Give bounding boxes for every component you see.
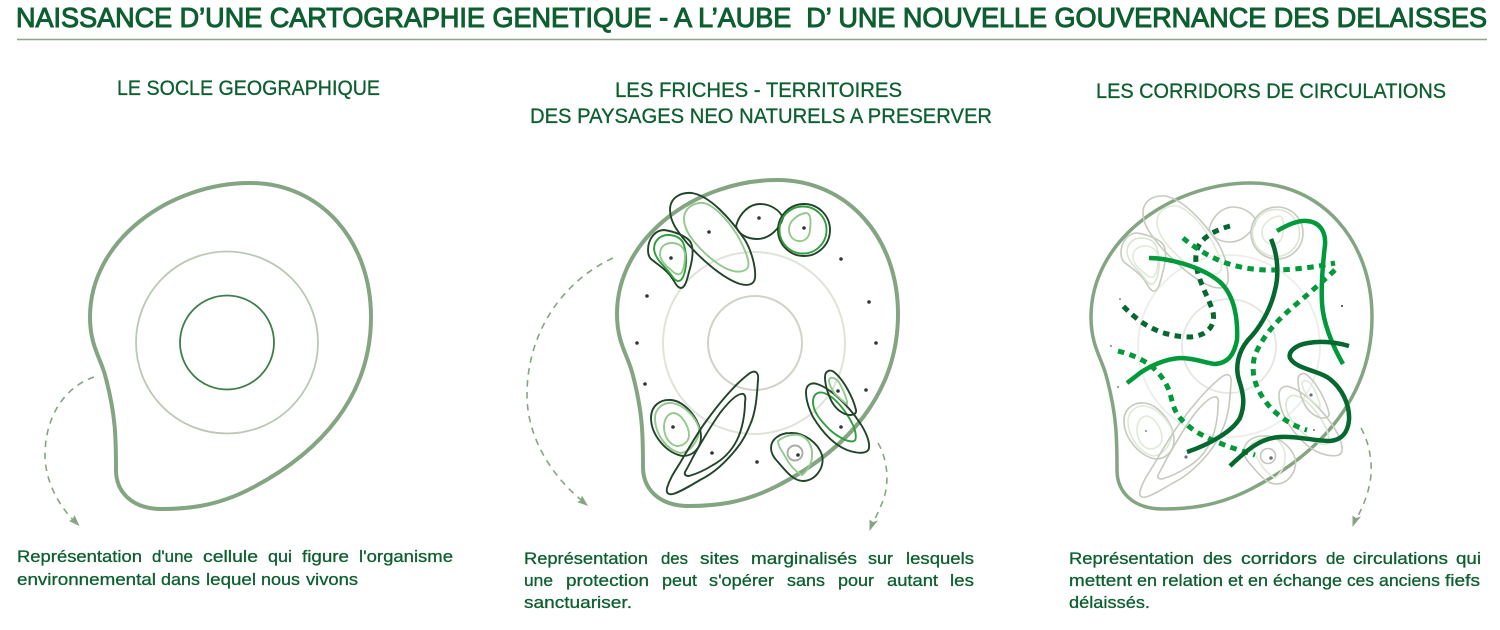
description text: vivons <box>306 570 358 589</box>
description text <box>1069 549 1481 612</box>
description text <box>17 547 453 589</box>
description text: dans <box>161 570 200 589</box>
outer ring <box>663 252 845 434</box>
inner ring <box>1182 299 1276 393</box>
description text: nous <box>261 570 300 589</box>
faded friche sites <box>1121 196 1342 497</box>
description text: échange <box>1273 571 1342 590</box>
description text: les <box>950 571 974 590</box>
description text: sans <box>787 571 825 590</box>
description text: figure <box>302 547 349 566</box>
description text: cellule <box>203 547 258 566</box>
arrow: dashed curve to text <box>45 377 94 526</box>
arrow: dashed curve right <box>1352 428 1371 527</box>
corridors: dashed routes <box>1118 226 1335 455</box>
description text: Représentation <box>524 549 648 568</box>
arrow: dashed curve left <box>527 258 613 506</box>
heading: les friches <box>530 79 992 128</box>
site dots <box>1110 298 1343 460</box>
description text: s'opérer <box>709 571 774 590</box>
description text: corridors <box>1241 549 1317 568</box>
description text: qui <box>268 547 292 566</box>
corridors: solid routes <box>1127 221 1349 466</box>
site dots <box>635 216 878 464</box>
description text: lequel <box>206 570 256 589</box>
description text: relation <box>1162 571 1223 590</box>
description text: des <box>1203 549 1232 568</box>
description text: en <box>1248 571 1268 590</box>
heading: les friches: DES PAYSAGES NEO NATURELS A PRESERVER <box>530 105 992 128</box>
description text: sanctuariser. <box>524 593 632 612</box>
description text: en <box>1137 571 1157 590</box>
panel: les corridors de circulations <box>1069 80 1481 612</box>
cell outline <box>617 180 898 506</box>
description text: marginalisés <box>751 549 857 568</box>
description text <box>524 549 974 612</box>
description text: mettent <box>1069 571 1132 590</box>
cell outline <box>90 183 371 509</box>
description text: anciens <box>1379 571 1440 590</box>
description text: autant <box>887 571 938 590</box>
title: NAISSANCE D’UNE CARTOGRAPHIE GENETIQUE - A L’AUBE D’ UNE NOUVELLE GOUVERNANCE DES DELAISSES <box>16 2 1487 33</box>
description text: qui <box>1456 549 1481 568</box>
description text: lesquels <box>906 549 974 568</box>
arrow: dashed curve right <box>870 443 887 531</box>
description text: délaissés. <box>1069 593 1150 612</box>
panel: les friches <box>524 79 992 612</box>
description text: sur <box>868 549 893 568</box>
description text: Représentation <box>17 547 142 566</box>
description text: peut <box>662 571 697 590</box>
inner ring <box>708 296 802 390</box>
description text: circulations <box>1353 549 1448 568</box>
description text: sites <box>700 549 739 568</box>
panel: le socle géographique <box>17 77 453 589</box>
description text: environnemental <box>17 570 156 589</box>
description text: pour <box>838 571 874 590</box>
friche sites <box>648 193 869 494</box>
heading: les friches: LES FRICHES - TERRITOIRES <box>615 79 902 102</box>
description text: Représentation <box>1069 549 1194 568</box>
description text: une <box>524 571 553 590</box>
description text: protection <box>566 571 649 590</box>
description text: fiefs <box>1445 571 1480 590</box>
description text: ces <box>1347 571 1374 590</box>
heading: le socle géographique: LE SOCLE GEOGRAPHIQUE <box>117 77 380 100</box>
heading: les corridors: LES CORRIDORS DE CIRCULATIONS <box>1096 80 1446 103</box>
cell outline <box>1091 183 1372 509</box>
outer ring <box>1138 255 1320 437</box>
description text: et <box>1228 571 1243 590</box>
description text: des <box>661 549 688 568</box>
description text: l'organisme <box>359 547 453 566</box>
inner ring <box>180 296 274 390</box>
description text: de <box>1326 549 1345 568</box>
description text: d'une <box>152 547 193 566</box>
outer ring <box>136 252 318 434</box>
